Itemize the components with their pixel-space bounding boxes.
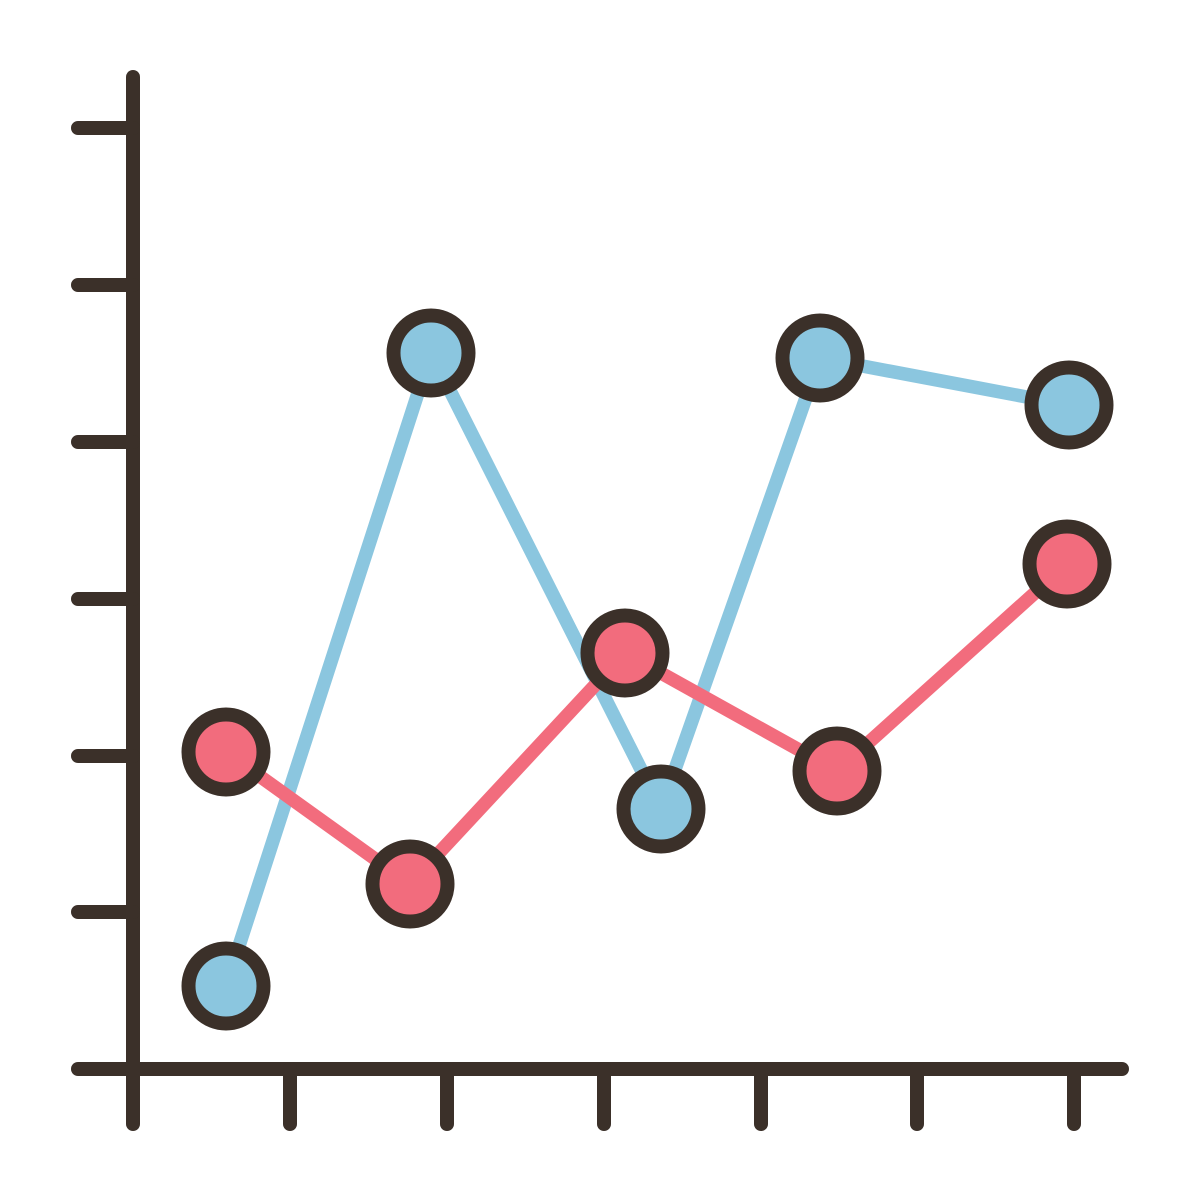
blue data line (226, 353, 1069, 986)
blue data points (188, 316, 1106, 1024)
x axis (78, 1062, 1122, 1076)
axes (78, 77, 1122, 1124)
red data points (188, 526, 1104, 922)
x axis ticks (290, 1069, 1074, 1124)
y axis ticks (78, 128, 133, 912)
y axis (126, 77, 140, 1124)
red data line (226, 564, 1067, 884)
